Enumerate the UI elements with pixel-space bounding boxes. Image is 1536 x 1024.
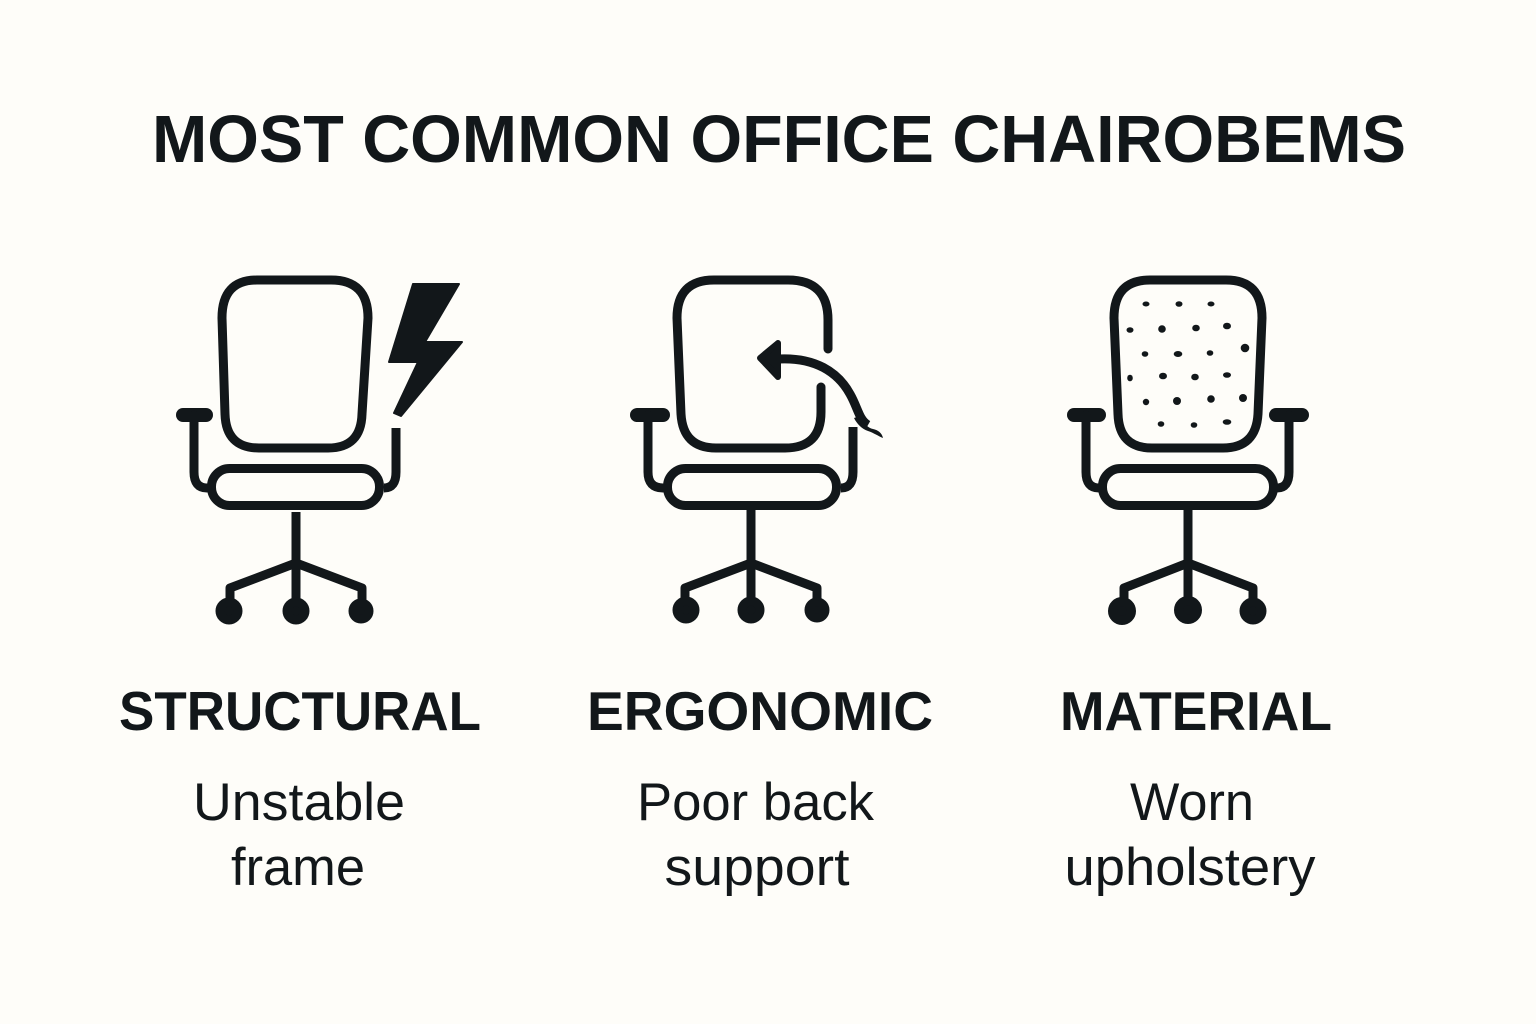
text: unstable frame: Unstable [193,773,405,832]
text: worn upholstery [1064,773,1316,897]
text: worn upholstery: Worn [1130,773,1254,832]
arrow: curved arrow pointing into backrest [760,343,883,438]
panel: material [1060,280,1332,897]
title: MOST COMMON OFFICE CHAIROBEMS [152,102,1406,177]
heading: ergonomic: ERGONOMIC [587,680,933,742]
text: poor back support [637,773,874,897]
texture: worn spots [1126,301,1249,428]
icon: chair with curved arrow [637,280,883,619]
text: unstable frame: frame [231,838,365,897]
panel: ergonomic [587,280,933,897]
icon: chair with lightning bolt [183,280,462,620]
text: worn upholstery: upholstery [1064,838,1316,897]
heading: material: MATERIAL [1060,680,1332,742]
icon: chair with worn dots [1074,280,1302,620]
text: poor back support: support [664,838,850,897]
text: unstable frame [193,773,405,897]
heading: structural: STRUCTURAL [119,680,481,742]
panel: structural [119,280,481,897]
text: poor back support: Poor back [637,773,874,832]
